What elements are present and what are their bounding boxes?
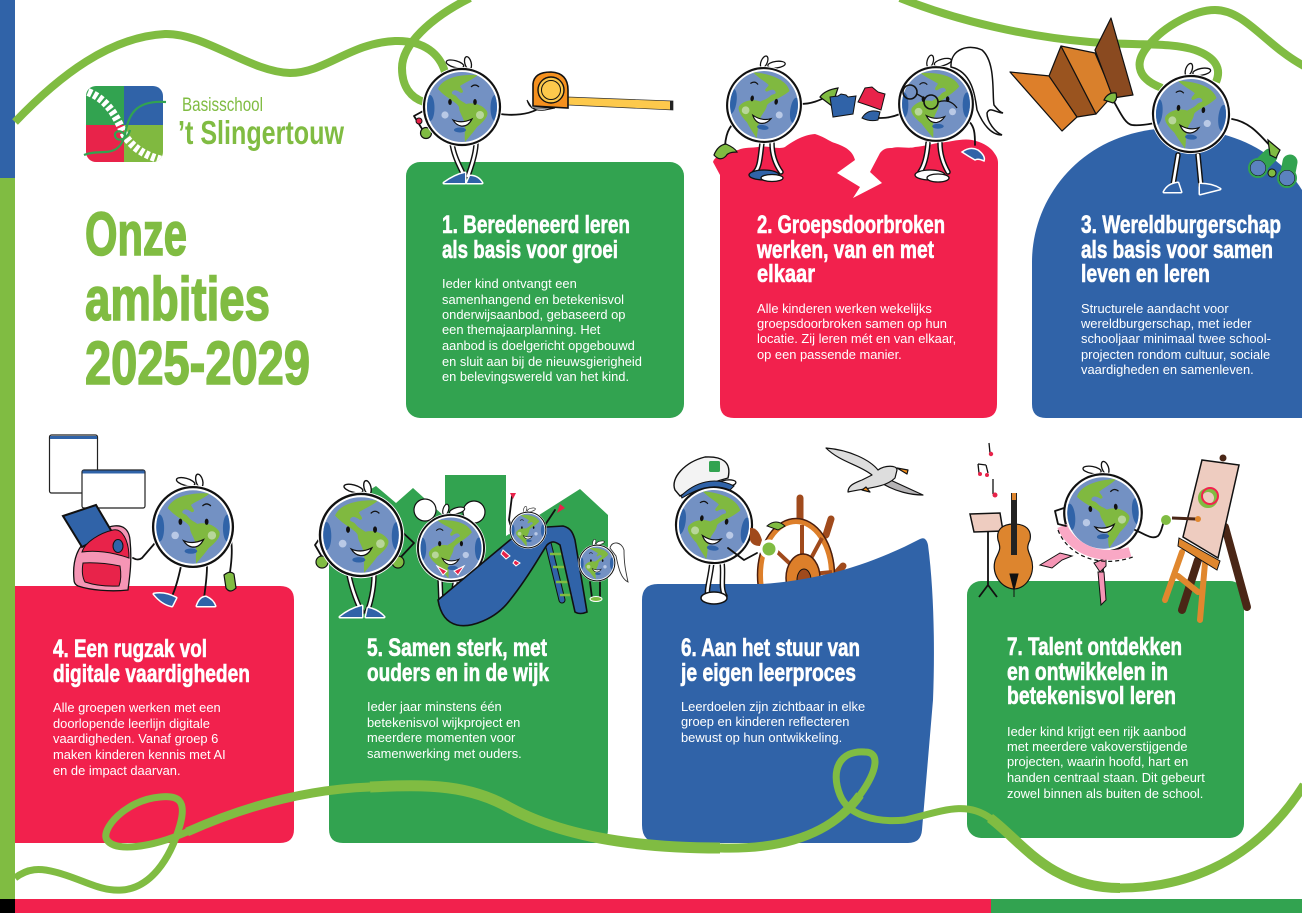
logo bbox=[84, 86, 344, 162]
panel 7 bbox=[967, 443, 1247, 838]
logo wordmark bbox=[178, 95, 344, 151]
character: small globe on slide bbox=[501, 493, 565, 566]
body text: groep en kinderen reflecteren bbox=[681, 714, 849, 729]
heading bbox=[680, 634, 860, 687]
title: Onze bbox=[85, 200, 187, 268]
icon: folded map bbox=[1010, 18, 1133, 131]
body text: op een passende manier. bbox=[757, 347, 902, 362]
icon: seagull bbox=[826, 448, 923, 495]
heading: je eigen leerproces bbox=[680, 659, 856, 687]
panel 1 bbox=[406, 56, 684, 418]
heading: 5. Samen sterk, met bbox=[367, 634, 548, 662]
icon: backpack with tablet and mouse bbox=[63, 505, 131, 591]
card background with crack bbox=[713, 134, 998, 418]
heading: leven en leren bbox=[1081, 260, 1210, 288]
panel 5 bbox=[315, 475, 628, 843]
icon: cello bbox=[994, 493, 1032, 597]
body text: meerdere momenten voor bbox=[367, 730, 516, 745]
heading: 7. Talent ontdekken bbox=[1007, 633, 1182, 661]
rope: bottom bbox=[15, 752, 1302, 890]
heading bbox=[442, 211, 630, 264]
heading: betekenisvol leren bbox=[1007, 682, 1176, 710]
body text: Ieder jaar minstens één bbox=[367, 699, 502, 714]
body text: groepsdoorbroken samen op hun bbox=[757, 316, 947, 331]
ponytail bbox=[951, 47, 1003, 135]
heading: ouders en in de wijk bbox=[367, 659, 549, 687]
heading bbox=[756, 211, 945, 288]
body text: schooljaar minimaal twee school- bbox=[1081, 331, 1271, 346]
panel 2 bbox=[713, 47, 1003, 418]
card background bbox=[967, 581, 1244, 838]
body text: vaardigheden. Vanaf groep 6 bbox=[53, 731, 218, 746]
body text: maken kinderen kennis met AI bbox=[53, 747, 226, 762]
heading bbox=[367, 634, 549, 687]
body text: en sluit aan bij de nieuwsgierigheid bbox=[442, 354, 642, 369]
body text: Ieder kind ontvangt een bbox=[442, 276, 577, 291]
icon: red puzzle piece bbox=[858, 87, 885, 110]
title bbox=[85, 200, 310, 397]
character: large globe, hands on hips bbox=[315, 480, 414, 617]
icon: music stand and notes bbox=[970, 443, 1003, 597]
body text: Leerdoelen zijn zichtbaar in elke bbox=[681, 699, 865, 714]
heading: 1. Beredeneerd leren bbox=[442, 211, 630, 239]
body text bbox=[1080, 301, 1271, 377]
title: 2025-2029 bbox=[85, 329, 310, 397]
heading bbox=[1007, 633, 1182, 710]
icon: easel with painting bbox=[1165, 454, 1247, 620]
body text: vaardigheden en samenleven. bbox=[1081, 362, 1254, 377]
character: globe with backpack bbox=[133, 473, 236, 606]
panel 6 bbox=[642, 448, 934, 843]
body text bbox=[53, 700, 226, 778]
heading bbox=[53, 635, 250, 688]
body text: projecten rondom cultuur, sociale bbox=[1081, 347, 1270, 362]
left colour strip bbox=[0, 0, 15, 913]
body text bbox=[367, 699, 522, 761]
body text: locatie. Zij leren mét en van elkaar, bbox=[757, 331, 956, 346]
character: globe ballerina bbox=[1040, 458, 1171, 605]
body text: betekenisvol wijkproject en bbox=[367, 715, 520, 730]
body text: wereldburgerschap, met ieder bbox=[1080, 316, 1252, 331]
logo mark bbox=[86, 86, 163, 162]
body text: een themajaarplanning. Het bbox=[442, 322, 601, 337]
character: globe cheering bbox=[414, 499, 486, 604]
body text: Alle groepen werken met een bbox=[53, 700, 221, 715]
logo wordmark: ’t Slingertouw bbox=[178, 114, 344, 151]
character: globe with blue puzzle piece bbox=[714, 51, 856, 182]
heading: 2. Groepsdoorbroken bbox=[757, 211, 945, 239]
body text: doorlopende leerlijn digitale bbox=[53, 716, 210, 731]
card background bbox=[1032, 128, 1302, 418]
body text: zowel binnen als buiten de school. bbox=[1007, 786, 1203, 801]
card background bbox=[15, 586, 294, 843]
body text: aanbod is doelgericht opgebouwd bbox=[442, 338, 635, 353]
heading: en ontwikkelen in bbox=[1007, 658, 1168, 686]
body text: bewust op hun ontwikkeling. bbox=[681, 730, 842, 745]
icon: ship's wheel bbox=[758, 498, 843, 632]
panel 3 bbox=[1010, 18, 1302, 418]
heading: digitale vaardigheden bbox=[53, 660, 250, 688]
title: ambities bbox=[85, 265, 270, 333]
heading bbox=[1081, 211, 1281, 288]
body text: Alle kinderen werken wekelijks bbox=[757, 301, 932, 316]
rope: top bbox=[15, 0, 1302, 122]
bottom colour bar bbox=[15, 899, 1302, 913]
icon: blue puzzle piece bbox=[830, 94, 856, 117]
body text: samenwerking met ouders. bbox=[367, 746, 522, 761]
card background bbox=[406, 162, 684, 418]
slide bbox=[438, 526, 587, 626]
card background bbox=[642, 538, 934, 843]
panel 4 bbox=[15, 435, 294, 843]
body text bbox=[442, 276, 642, 384]
body text: en de impact daarvan. bbox=[53, 763, 181, 778]
body text: Structurele aandacht voor bbox=[1081, 301, 1229, 316]
body text bbox=[757, 301, 956, 362]
character: globe with glasses and ponytail bbox=[858, 47, 1003, 182]
body text bbox=[681, 699, 865, 745]
heading: als basis voor groei bbox=[442, 236, 618, 264]
body text: projecten, waarin hoofd, hart en bbox=[1007, 754, 1188, 769]
character: small globe with ponytail bbox=[578, 539, 628, 602]
heading: 6. Aan het stuur van bbox=[681, 634, 860, 662]
body text: Ieder kind krijgt een rijk aanbod bbox=[1007, 724, 1186, 739]
body text: en belevingswereld van het kind. bbox=[442, 369, 629, 384]
character: globe with tape measure bbox=[414, 56, 673, 183]
character: globe captain bbox=[669, 457, 785, 604]
heading: werken, van en met bbox=[756, 236, 935, 264]
body text bbox=[1007, 724, 1205, 801]
body text: onderwijsaanbod, gebaseerd op bbox=[442, 307, 625, 322]
icon: binoculars bbox=[1249, 140, 1296, 187]
logo wordmark: Basisschool bbox=[182, 95, 263, 116]
body text: samenhangend en betekenisvol bbox=[442, 292, 624, 307]
body text: handen centraal staan. Dit gebeurt bbox=[1007, 770, 1205, 785]
heading: 4. Een rugzak vol bbox=[53, 635, 207, 663]
body text: met meerdere vakoverstijgende bbox=[1007, 739, 1188, 754]
character: globe with map and binoculars bbox=[1104, 60, 1296, 194]
icon: tape measure bbox=[533, 72, 673, 110]
captain's cap bbox=[674, 457, 734, 498]
icon: browser windows bbox=[50, 435, 145, 508]
card background bbox=[329, 475, 608, 843]
heading: elkaar bbox=[757, 260, 815, 288]
